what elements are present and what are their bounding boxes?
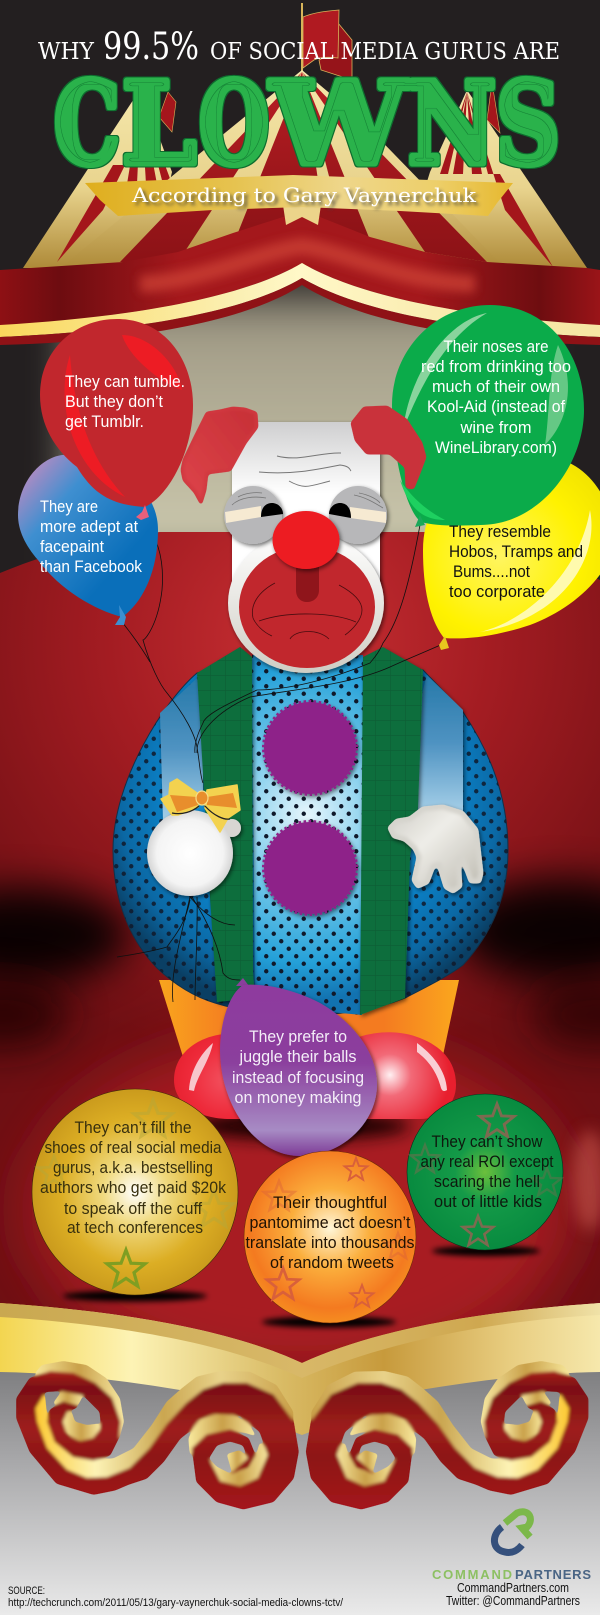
tent: side flags xyxy=(141,77,500,133)
contact text: CommandPartners.com xyxy=(457,1580,569,1595)
white balloon ball xyxy=(147,810,241,896)
orange ball text: translate into thousands xyxy=(246,1234,414,1252)
clown body xyxy=(113,647,508,1015)
icon: yellow bow tie xyxy=(161,779,240,832)
heading: CLOWNS: C xyxy=(54,59,120,190)
icon: main flag and pole xyxy=(302,3,352,80)
green balloon text: WineLibrary.com) xyxy=(435,439,557,457)
purple balloon text: juggle their balls xyxy=(239,1048,356,1066)
green balloon text: red from drinking too xyxy=(421,358,571,376)
shirt dots xyxy=(113,650,508,1015)
purple balloon text xyxy=(232,1028,364,1107)
balloon: yellow xyxy=(423,457,600,650)
source text: SOURCE: xyxy=(8,1585,45,1597)
stars xyxy=(411,1104,561,1245)
background: red backdrop xyxy=(0,532,600,1380)
balloon knot xyxy=(415,515,425,527)
heading: CLOWNS: O xyxy=(199,59,269,190)
background: tent interior spotlight xyxy=(70,290,530,560)
balloon: green xyxy=(392,305,584,527)
green balloon text: wine from xyxy=(460,419,532,437)
nose xyxy=(272,511,340,569)
background: dark top xyxy=(0,0,600,600)
left eye xyxy=(224,486,283,544)
contact text xyxy=(446,1580,580,1608)
purple balloon text: on money making xyxy=(234,1089,362,1107)
red balloon text xyxy=(65,373,185,431)
centre panel dots xyxy=(252,655,363,1015)
red balloon text: But they don’t xyxy=(65,393,163,411)
balloon knot xyxy=(136,505,149,520)
green ball text xyxy=(420,1133,554,1211)
heading: CLOWNS: S xyxy=(496,59,560,190)
source text: http://techcrunch.com/2011/05/13/gary-vaynerchuk-social-media-clowns-tctv/ xyxy=(8,1597,344,1609)
blue balloon text: than Facebook xyxy=(40,558,143,576)
yellow ball text: at tech conferences xyxy=(67,1219,203,1237)
icon: white glove xyxy=(390,807,481,891)
yellow ball text: authors who get paid $20k xyxy=(40,1179,227,1197)
balloon: red xyxy=(40,319,193,520)
forehead wrinkles xyxy=(259,453,351,486)
green ball text: scaring the hell xyxy=(434,1173,540,1191)
stars xyxy=(38,1100,233,1286)
grey floor xyxy=(0,1372,600,1615)
green balloon text xyxy=(421,338,571,457)
clown head xyxy=(182,407,425,673)
banner xyxy=(85,175,513,225)
balloon strings xyxy=(117,517,445,1002)
clown shoe: right xyxy=(350,1032,456,1119)
yellow balloon text: Bums....not xyxy=(453,563,530,581)
orange ball text xyxy=(246,1194,414,1272)
logo wordmark: COMMAND xyxy=(432,1567,512,1582)
orange ball text: Their thoughtful xyxy=(273,1194,387,1212)
hair right xyxy=(352,407,425,488)
tent: left side tent xyxy=(23,88,172,268)
yellow balloon text: too corporate xyxy=(449,583,545,601)
heading line: WHY xyxy=(38,39,95,65)
logo wordmark xyxy=(432,1567,591,1582)
clown shoe: left xyxy=(174,1034,245,1119)
banner text: According to Gary Vaynerchuk xyxy=(131,183,477,207)
purple button bottom xyxy=(264,822,356,914)
yellow balloon text xyxy=(449,523,583,601)
red balloon text: get Tumblr. xyxy=(65,413,144,431)
yellow balloon text: Hobos, Tramps and xyxy=(449,543,583,561)
vest left xyxy=(197,647,255,1002)
heading: CLOWNS: W xyxy=(270,59,409,190)
heading: CLOWNS: N xyxy=(408,59,496,190)
yellow ball text xyxy=(40,1119,227,1237)
decorative scroll: right pair xyxy=(306,1361,588,1509)
heading: CLOWNS xyxy=(54,59,560,190)
orange ball text: pantomime act doesn’t xyxy=(250,1214,411,1232)
blue balloon text: facepaint xyxy=(40,538,104,556)
purple button top xyxy=(264,702,356,794)
shadows under balls xyxy=(63,1246,540,1328)
ball: yellow xyxy=(32,1089,238,1295)
right strap xyxy=(418,675,463,812)
heading line: 99.5% xyxy=(103,25,199,68)
heading: CLOWNS: L xyxy=(122,59,196,190)
right eye xyxy=(329,486,387,544)
purple balloon text: They prefer to xyxy=(249,1028,347,1046)
yellow ball text: gurus, a.k.a. bestselling xyxy=(53,1159,213,1177)
mouth xyxy=(239,546,375,668)
gold stage valance xyxy=(0,1303,600,1435)
tent: main tent with stripes xyxy=(60,70,540,268)
green balloon text: Their noses are xyxy=(444,338,548,356)
logo wordmark: PARTNERS xyxy=(515,1567,591,1582)
green ball text: out of little kids xyxy=(434,1193,542,1211)
vest right xyxy=(360,647,423,1015)
shirt sides xyxy=(113,650,508,1015)
balloon knot xyxy=(115,605,126,625)
blue balloon text: more adept at xyxy=(40,518,138,536)
frown lines xyxy=(252,583,362,639)
heading line xyxy=(38,25,560,68)
green ball text: They can’t show xyxy=(432,1133,543,1151)
purple balloon text: instead of focusing xyxy=(232,1069,364,1087)
tongue xyxy=(296,560,319,602)
heading line: OF SOCIAL MEDIA GURUS ARE xyxy=(210,39,560,65)
yellow balloon text: They resemble xyxy=(449,523,551,541)
clown legs: orange pants xyxy=(159,980,459,1060)
green balloon text: much of their own xyxy=(432,378,560,396)
shirt centre panel xyxy=(252,655,363,1015)
balloon: purple xyxy=(220,978,377,1156)
chin ring xyxy=(228,533,384,673)
curtain valance xyxy=(0,215,600,345)
balloon knot xyxy=(439,636,449,650)
face xyxy=(232,422,380,600)
balloon: blue xyxy=(18,455,158,625)
green ball text: any real ROI except xyxy=(420,1153,554,1171)
orange ball text: of random tweets xyxy=(270,1254,394,1272)
blue balloon text xyxy=(40,498,143,576)
hair left xyxy=(182,408,257,503)
logo: Command Partners xyxy=(494,1512,530,1553)
source text xyxy=(8,1585,344,1609)
yellow ball text: They can’t fill the xyxy=(74,1119,192,1137)
red balloon text: They can tumble. xyxy=(65,373,185,391)
yellow ball text: to speak off the cuff xyxy=(64,1200,202,1218)
decorative scroll: left pair xyxy=(17,1361,298,1509)
blue balloon text: They are xyxy=(40,498,98,516)
ball: green xyxy=(407,1094,563,1250)
stars xyxy=(264,1158,411,1307)
tent: right side tent xyxy=(400,90,587,268)
left strap xyxy=(160,678,203,820)
green balloon text: Kool-Aid (instead of xyxy=(427,398,565,416)
ball: orange xyxy=(244,1151,416,1323)
yellow ball text: shoes of real social media xyxy=(44,1139,222,1157)
